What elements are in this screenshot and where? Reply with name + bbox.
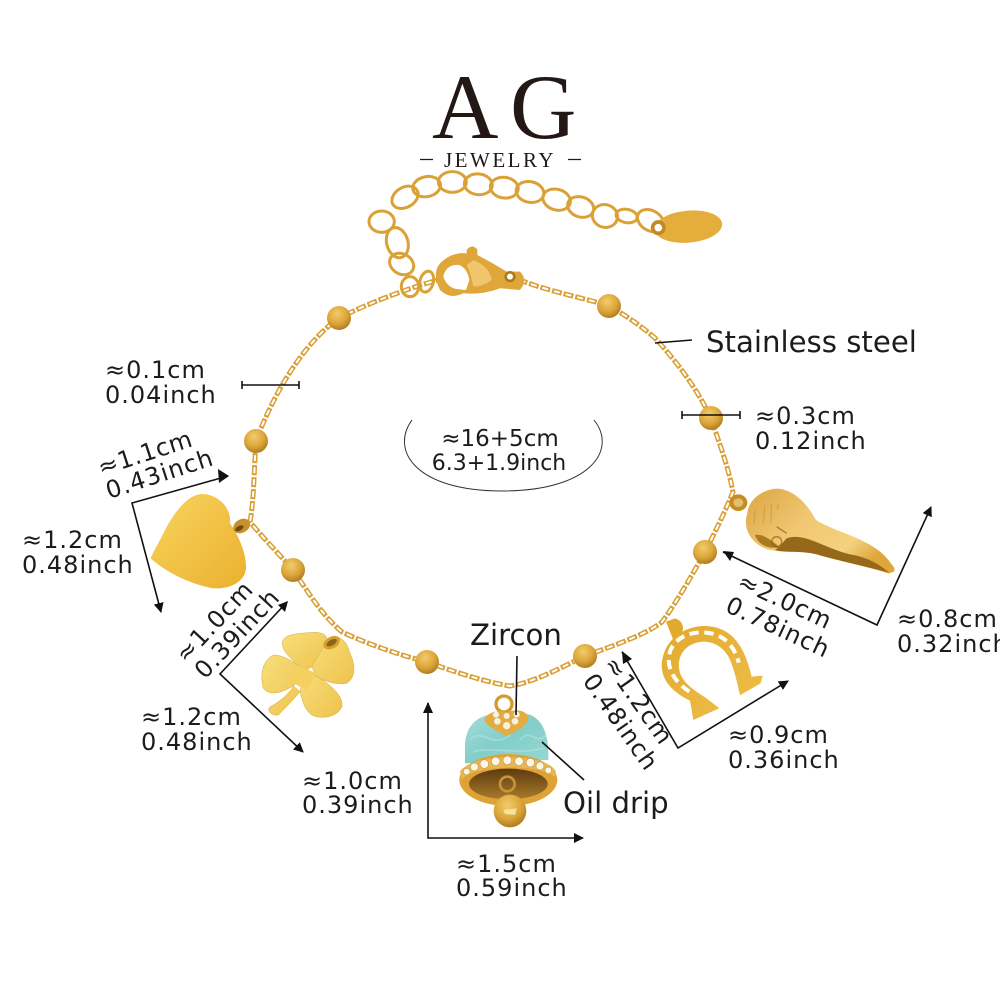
dimension: total length: ≈16+5cm: [441, 426, 559, 452]
charm: enamel bell: [459, 696, 557, 827]
dimension: horseshoe: ≈0.9cm: [728, 721, 829, 749]
dimension: bell: ≈1.0cm: [302, 767, 403, 795]
dimension: clover: 0.39inch: [189, 583, 286, 684]
dimension: horseshoe: 0.36inch: [728, 746, 840, 774]
dimension: horn: ≈2.0cm: [733, 567, 837, 635]
dimension: clover: [141, 575, 303, 756]
extension links: [369, 172, 668, 297]
heart pave: [484, 710, 529, 736]
dimension: bell: [302, 702, 583, 902]
clapper ball: [494, 795, 526, 827]
charm: horseshoe: [662, 618, 763, 720]
dimension: heart: 0.43inch: [102, 444, 217, 505]
label: zircon: [470, 618, 562, 715]
dimension: heart: [22, 425, 229, 612]
charm: heart: [151, 494, 253, 588]
dimension: heart: ≈1.2cm: [22, 526, 123, 554]
dimension: chain width: 0.04inch: [105, 381, 217, 409]
rim: [459, 754, 557, 806]
tag ring: [653, 222, 664, 233]
dimension: heart: ≈1.1cm: [94, 425, 196, 482]
top loop: [496, 696, 512, 712]
lobster clasp: [436, 246, 524, 296]
dimension: bead size: [682, 402, 867, 455]
bracelet chain: [250, 278, 733, 686]
logo wordmark JEWELRY: JEWELRY: [444, 148, 556, 172]
inner opening: [469, 769, 548, 799]
extension chain with tag: [369, 172, 724, 297]
logo: [420, 56, 581, 172]
dimension: total length: [404, 420, 602, 491]
dimension: clover: 0.48inch: [141, 728, 253, 756]
dimension: bell: 0.39inch: [302, 791, 414, 819]
dimension: clover: ≈1.0cm: [170, 575, 259, 668]
dimension: horseshoe: ≈1.2cm: [598, 651, 679, 750]
dimension: bead size: ≈0.3cm: [755, 402, 856, 430]
dimension: horseshoe: [577, 651, 840, 776]
label: oil drip: Oil drip: [563, 786, 669, 820]
label: stainless steel: Stainless steel: [706, 325, 917, 359]
dimension: bell: ≈1.5cm: [456, 850, 557, 878]
bell body: [465, 713, 548, 763]
charm: four-leaf clover: [262, 632, 354, 717]
beads: [244, 294, 723, 674]
heart ring: [231, 516, 253, 536]
dimension: horn: ≈0.8cm: [897, 605, 998, 633]
charm: horn: [731, 489, 895, 573]
clapper loop: [500, 777, 515, 791]
logo letter G: G: [510, 56, 576, 158]
dimension: bead size: 0.12inch: [755, 427, 867, 455]
dimension: horseshoe: 0.48inch: [577, 668, 664, 776]
dimension: bell: 0.59inch: [456, 874, 568, 902]
oval tag: [653, 208, 724, 246]
dimension: total length: 6.3+1.9inch: [432, 451, 566, 476]
crystal band: [460, 757, 556, 779]
dimension: heart: 0.48inch: [22, 551, 134, 579]
dimension: horn: 0.78inch: [721, 591, 835, 664]
dimension: horn: [721, 507, 1000, 664]
dimension: chain width: ≈0.1cm: [105, 356, 206, 384]
label: zircon: Zircon: [470, 618, 562, 652]
dimension: clover: ≈1.2cm: [141, 703, 242, 731]
dimension: chain width: [105, 356, 299, 409]
label: oil drip: [542, 742, 669, 820]
logo letter A: A: [432, 56, 498, 158]
